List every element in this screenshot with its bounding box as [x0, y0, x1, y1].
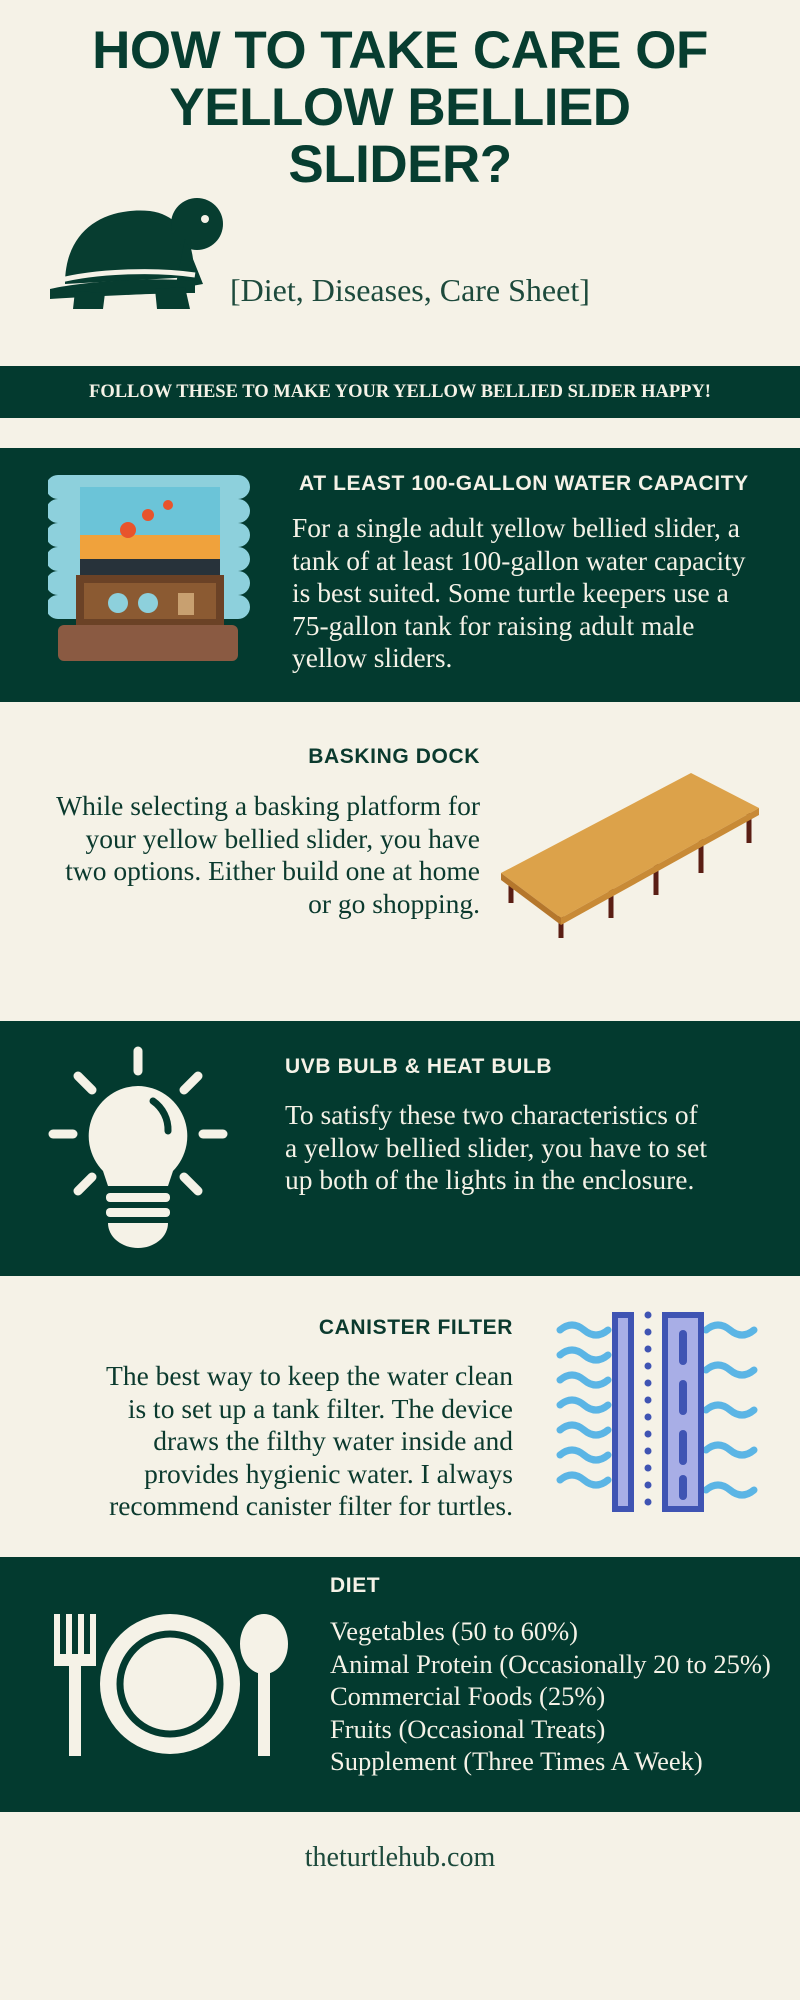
title: HOW TO TAKE CARE OF	[92, 21, 708, 80]
panel: bulbs	[0, 1021, 800, 1276]
icon: dock	[501, 773, 759, 938]
body text: To satisfy these two characteristics of	[285, 1099, 698, 1130]
title	[92, 21, 708, 194]
banner	[0, 366, 800, 418]
body text: tank of at least 100-gallon water capacity	[292, 544, 746, 576]
body text: yellow sliders.	[292, 642, 452, 673]
list: Vegetables (50 to 60%)	[330, 1616, 578, 1646]
subtitle: [Diet, Diseases, Care Sheet]	[230, 272, 590, 308]
list: Fruits (Occasional Treats)	[330, 1714, 605, 1744]
icon: fork, plate, spoon	[54, 1614, 288, 1756]
icon: filter	[556, 1312, 758, 1512]
icon: turtle	[50, 198, 223, 309]
panel: basking dock	[56, 745, 759, 938]
heading: UVB BULB & HEAT BULB	[285, 1055, 552, 1078]
heading: AT LEAST 100-GALLON WATER CAPACITY	[299, 472, 749, 495]
body text: 75-gallon tank for raising adult male	[292, 610, 694, 640]
body text: The best way to keep the water clean	[106, 1360, 513, 1391]
body text: two options. Either build one at home	[65, 855, 480, 886]
body text	[285, 1099, 707, 1195]
body text	[106, 1360, 513, 1521]
body text: is to set up a tank filter. The device	[128, 1392, 513, 1424]
body text: is best suited. Some turtle keepers use a	[292, 577, 729, 608]
body text: a yellow bellied slider, you have to set	[285, 1132, 707, 1162]
heading: BASKING DOCK	[308, 745, 480, 768]
heading: CANISTER FILTER	[319, 1316, 513, 1339]
banner: FOLLOW THESE TO MAKE YOUR YELLOW BELLIED SLIDER HAPPY!	[89, 382, 711, 402]
body text: draws the filthy water inside and	[153, 1425, 513, 1456]
body text	[292, 512, 746, 673]
body text: or go shopping.	[308, 888, 480, 918]
body text	[56, 790, 480, 919]
list	[330, 1616, 771, 1776]
title: SLIDER?	[288, 135, 512, 194]
icon: light bulb	[48, 1046, 228, 1248]
panel: canister filter	[106, 1312, 758, 1521]
footer: theturtlehub.com	[305, 1842, 495, 1873]
panel: water capacity	[0, 448, 800, 702]
list: Commercial Foods (25%)	[330, 1681, 605, 1711]
body text: While selecting a basking platform for	[56, 790, 480, 821]
body text: your yellow bellied slider, you have	[86, 822, 480, 854]
icon: aquarium	[48, 475, 250, 661]
list: Animal Protein (Occasionally 20 to 25%)	[330, 1648, 771, 1678]
panel: diet	[0, 1557, 800, 1812]
heading: DIET	[330, 1574, 380, 1597]
body text: up both of the lights in the enclosure.	[285, 1164, 694, 1195]
title: YELLOW BELLIED	[169, 78, 631, 137]
body text: For a single adult yellow bellied slider, a	[292, 512, 740, 543]
list: Supplement (Three Times A Week)	[330, 1746, 703, 1776]
body text: provides hygienic water. I always	[144, 1458, 513, 1488]
body text: recommend canister filter for turtles.	[109, 1490, 513, 1521]
